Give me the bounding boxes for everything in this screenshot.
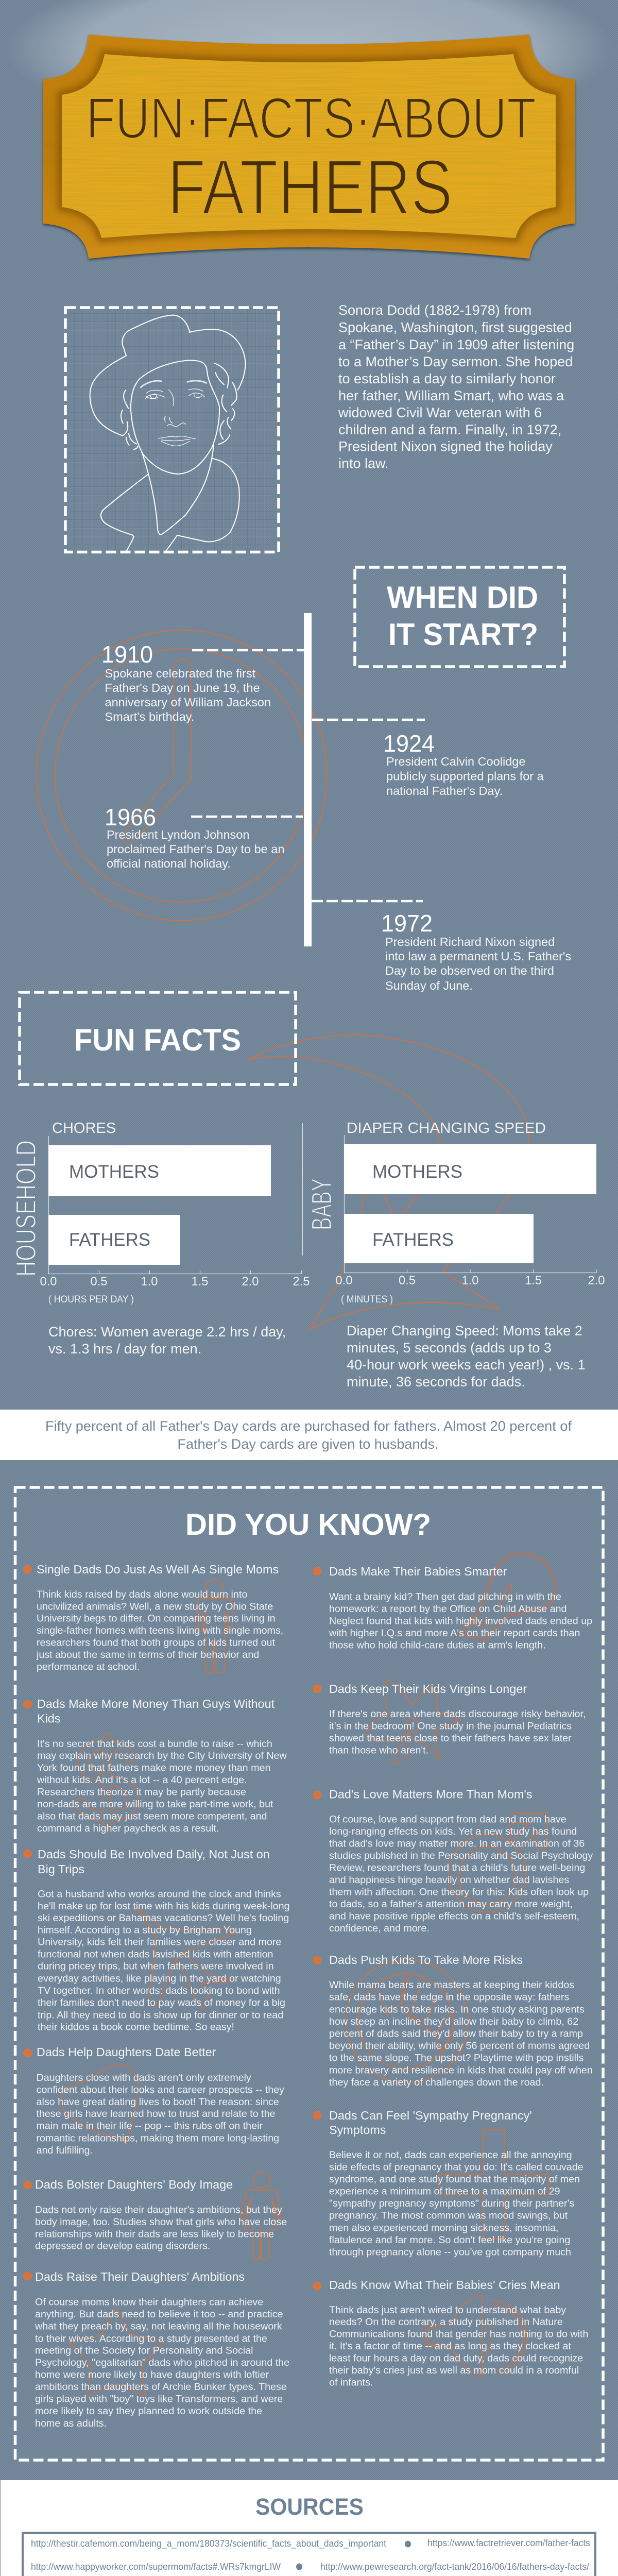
fact: date better: these girls have learned how to trust and relate to the xyxy=(36,2108,276,2120)
fact: body image: Dads not only raise their daughter's ambitions, but they xyxy=(35,2204,282,2215)
fact: involved daily: TV together. In other words: dads looking to bond with xyxy=(38,1985,280,1996)
bar chart: chores: 0.0 xyxy=(40,1275,57,1289)
bar chart: diaper changing speed: DIAPER CHANGING SPEED xyxy=(347,1120,546,1137)
fact: sympathy pregnancy: through pregnancy alone -- you've got company much xyxy=(329,2246,571,2258)
fact: more money: non-dads are more willing to take part-time work, but xyxy=(37,1799,273,1810)
fact: ambitions: home were more likely to have daughters with loftier xyxy=(35,2369,269,2380)
bar chart: chores: 1.0 xyxy=(141,1275,158,1289)
fact: involved daily: Big Trips xyxy=(38,1862,84,1876)
timeline entry 1910: anniversary of William Jackson xyxy=(105,696,271,709)
fact: virgins longer: Dads Keep Their Kids Virgins Longer xyxy=(329,1682,527,1696)
fact: babies' cries: Dads Know What Their Babies' Cries Mean xyxy=(329,2278,560,2292)
icon: airplane xyxy=(137,1908,235,2009)
fact: ambitions: girls played with "boy" toys like Transformers, and were xyxy=(35,2394,283,2405)
bar chart: chores: ( HOURS PER DAY ) xyxy=(48,1294,134,1305)
fact: dad's love: Dad's Love Matters More Than Mom's xyxy=(329,1788,533,1801)
timeline entry 1924: publicly supported plans for a xyxy=(386,770,544,783)
fact: virgins longer: than those who aren't. xyxy=(329,1744,428,1756)
fact: single dads: University begs to differ. On comparing teens living in xyxy=(37,1613,276,1624)
fact: more money: York found that fathers make more money than men xyxy=(37,1762,270,1773)
fact: single dads: just about the same in terms of their behavior and xyxy=(36,1649,259,1660)
fact: date better: romantic relationships, making them more long-lasting xyxy=(36,2133,279,2144)
fact: involved daily: their families don't need to pay wads of money for a big xyxy=(38,1997,285,2008)
heading: did you know: DID YOU KNOW? xyxy=(185,1508,431,1541)
fact: date better: and fulfilling. xyxy=(36,2145,93,2156)
icon: mustache outline xyxy=(248,1035,529,1329)
fact: more risks: safe, dads have the edge in the opposite way: fathers xyxy=(329,1992,569,2003)
fact: involved daily: functional not when dads lavished kids with attention xyxy=(38,1948,273,1960)
timeline entry 1972 xyxy=(381,910,575,992)
timeline entry 1924: 1924 xyxy=(383,730,435,757)
bullet xyxy=(313,2111,321,2120)
fact: more risks: While mama bears are masters at keeping their kiddos xyxy=(329,1979,574,1991)
timeline entry 1924 xyxy=(383,730,547,798)
timeline entry 1910: 1910 xyxy=(101,641,153,668)
fact: ambitions: meeting of the Society for Personality and Social xyxy=(35,2345,253,2357)
heading: sources: SOURCES xyxy=(255,2494,364,2520)
fact: more money: may explain why research by the City University of New xyxy=(37,1750,287,1761)
fact: virgins longer: If there's one area where dads discourage risky behavior, xyxy=(329,1708,586,1720)
icon: line-art portrait xyxy=(90,315,246,552)
callout band: cards statistic: Fifty percent of all Father's Day cards are purchased for fathers. Almost 20 percent of xyxy=(45,1418,572,1434)
fact: ambitions: what they preach by, say, not leaving all the housework xyxy=(35,2320,282,2332)
fact: more risks: they face a variety of challenges down the road. xyxy=(329,2077,544,2088)
fact: dad's love xyxy=(313,1788,596,1934)
icon: woman figure xyxy=(239,2172,282,2259)
panel: source links xyxy=(23,2533,595,2576)
fact: sympathy pregnancy: experience a minimum of three to a maximum of 29 xyxy=(329,2185,560,2197)
heading: when did it start: WHEN DID xyxy=(387,580,538,615)
fact: babies' cries xyxy=(313,2278,591,2388)
timeline entry 1910: Spokane celebrated the first xyxy=(105,667,256,680)
fact: babies' cries: it. It's a factor of time -- and as long as they clocked at xyxy=(329,2341,571,2352)
bar chart: chores: 2.5 xyxy=(293,1275,310,1289)
bar chart: diaper changing speed: ( MINUTES ) xyxy=(341,1294,393,1305)
bar chart: chores xyxy=(10,1120,310,1305)
fact: ambitions: more likely to say they planned to work outside the xyxy=(35,2405,262,2417)
bar chart: diaper changing speed: 1.5 xyxy=(525,1274,542,1287)
fact: virgins longer xyxy=(313,1682,589,1756)
text block: chores caption: vs. 1.3 hrs / day for men. xyxy=(48,1341,201,1357)
text block: chores caption: Chores: Women average 2.2 hrs / day, xyxy=(48,1324,286,1340)
bar chart: chores: 1.5 xyxy=(192,1275,208,1289)
fact: sympathy pregnancy: "sympathy pregnancy symptoms" during their partner's xyxy=(329,2198,574,2209)
bullet xyxy=(313,1567,321,1575)
fact: sympathy pregnancy: Dads Can Feel 'Sympathy Pregnancy' xyxy=(329,2109,532,2122)
fact: babies' cries: least four hours a day on dad duty, dads could recognize xyxy=(329,2352,583,2364)
timeline entry 1972: President Richard Nixon signed xyxy=(385,935,555,948)
fact: sympathy pregnancy: flatulence and far more. So don't feel like you're going xyxy=(329,2234,570,2246)
fact: more risks: Dads Push Kids To Take More Risks xyxy=(329,1953,523,1967)
fact: smarter babies: Neglect found that kids with highly involved dads ended up xyxy=(329,1616,592,1627)
fact: involved daily: ski expeditions or Bahamas vacations? Well he's fooling xyxy=(38,1912,289,1924)
bar chart: diaper changing speed xyxy=(305,1120,605,1305)
bullet xyxy=(313,2281,321,2291)
fact: sympathy pregnancy: Believe it or not, dads can experience all the annoying xyxy=(329,2149,572,2161)
heading: fun facts xyxy=(20,992,296,1084)
fact: single dads: Single Dads Do Just As Well As Single Moms xyxy=(37,1563,279,1576)
panel: source links: https://www.factretriever.com/father-facts xyxy=(427,2538,590,2548)
bar: mothers chores xyxy=(48,1145,271,1196)
text block: Sonora Dodd intro: President Nixon signed the holiday xyxy=(338,439,553,454)
icon: clock outline xyxy=(37,630,327,921)
icon: plus sign xyxy=(438,2130,548,2239)
timeline entry 1972: Day to be observed on the third xyxy=(385,964,554,977)
icon: star xyxy=(69,2308,164,2396)
timeline entry 1966 xyxy=(105,804,288,870)
fact: dad's love: studies published in the Personality and Social Psychology xyxy=(329,1850,593,1861)
fact: ambitions: home as adults. xyxy=(35,2418,107,2429)
fact: ambitions: Dads Raise Their Daughters' Ambitions xyxy=(35,2270,245,2283)
fact: dad's love: and have positive ripple effects on a child's self-esteem, xyxy=(329,1910,579,1922)
fact: virgins longer: it's in the bedroom! One study in the journal Pediatrics xyxy=(329,1721,572,1732)
bar chart: chores: 0.5 xyxy=(91,1275,107,1289)
fact: more money: Researchers theorize it may be partly because xyxy=(37,1787,246,1798)
fact: sympathy pregnancy xyxy=(313,2109,586,2258)
text block: Sonora Dodd intro: to establish a day to similarly honor xyxy=(338,371,556,386)
icon: male symbol xyxy=(449,1813,547,1912)
fact: more risks: to the same slope. The upshot? Playtime with pop instills xyxy=(329,2053,583,2064)
fact: body image xyxy=(23,2178,290,2251)
callout band: cards statistic: Father's Day cards are given to husbands. xyxy=(177,1436,439,1452)
bar: fathers chores xyxy=(48,1215,180,1265)
fact: smarter babies xyxy=(313,1565,595,1651)
fact: smarter babies: Want a brainy kid? Then get dad pitching in with the xyxy=(329,1591,561,1602)
timeline entry 1910: Smart's birthday. xyxy=(105,710,194,723)
title text: FATHERS xyxy=(167,143,453,230)
fact: more risks: percent of dads said they'd allow their baby to try a ramp xyxy=(329,2028,583,2039)
icon: heart xyxy=(62,2065,138,2142)
panel: did you know xyxy=(15,1487,603,2460)
timeline entry 1972: into law a permanent U.S. Father's xyxy=(385,950,571,963)
text block: Sonora Dodd intro: her father, William Smart, who was a xyxy=(338,388,564,403)
fact: involved daily: he'll make up for lost time with his kids during week-long xyxy=(38,1901,290,1912)
panel: source links: http://www.happyworker.com/supermom/facts#.WRs7kmgrLIW xyxy=(31,2562,281,2572)
bullet xyxy=(313,1791,321,1799)
bullet xyxy=(313,1956,321,1965)
fact: date better: Daughters close with dads aren't only extremely xyxy=(36,2072,251,2083)
fact: more risks: beyond their ability, while only 56 percent of moms agreed xyxy=(329,2040,590,2052)
timeline entry 1924: national Father's Day. xyxy=(386,784,503,798)
fact: more money: Dads Make More Money Than Guys Without xyxy=(37,1697,275,1710)
fact: involved daily: Dads Should Be Involved Daily, Not Just on xyxy=(38,1848,270,1861)
bullet xyxy=(23,2180,32,2190)
fact: smarter babies: with higher I.Q.s and more A's on their report cards than xyxy=(329,1628,580,1639)
fact: dad's love: confidence, and more. xyxy=(329,1923,430,1934)
fact: babies' cries: Think dads just aren't wired to understand what baby xyxy=(329,2304,566,2316)
panel: source links: http://thestir.cafemom.com/being_a_mom/180373/scientific_facts_about_dads_important xyxy=(31,2538,386,2549)
fact: ambitions: Psychology, "egalitarian" dads who pitched in around the xyxy=(35,2357,289,2368)
bullet xyxy=(313,1685,321,1693)
fact: ambitions: anything. But dads need to believe it too -- and practice xyxy=(35,2309,283,2320)
panel: source links: http://www.pewresearch.org/fact-tank/2016/06/16/fathers-day-facts/ xyxy=(320,2562,589,2572)
icon: light bulb xyxy=(461,1554,555,1640)
fact: more risks: how steep an incline they'd allow their baby to climb, 62 xyxy=(329,2016,578,2027)
timeline entry 1910 xyxy=(101,641,274,723)
fact: body image: Dads Bolster Daughters' Body Image xyxy=(35,2178,233,2191)
fact: ambitions: to their wives. According to a study presented at the xyxy=(35,2333,267,2344)
bar chart: diaper changing speed: 2.0 xyxy=(588,1274,605,1287)
fact: ambitions xyxy=(23,2270,293,2429)
fact: babies' cries: needs? On the contrary, a study published in Nature xyxy=(329,2316,563,2328)
bullet xyxy=(23,1565,32,1573)
fact: more money: without kids. And it's a lot -- a 40 percent edge. xyxy=(37,1774,247,1786)
bullet xyxy=(23,1700,32,1708)
icon: man figure xyxy=(198,1580,232,1672)
bar chart: diaper changing speed: 0.0 xyxy=(336,1274,352,1287)
fact: more money: command a higher paycheck as a result. xyxy=(37,1823,219,1834)
callout band: cards statistic xyxy=(0,1410,618,1460)
fact: more risks xyxy=(313,1953,595,2088)
timeline entry 1972: 1972 xyxy=(381,910,433,937)
fact: dad's love: Of course, love and support from dad and mom have xyxy=(329,1814,566,1825)
heading: when did it start xyxy=(355,567,564,667)
bar: fathers diaper: FATHERS xyxy=(372,1230,454,1250)
timeline xyxy=(101,613,575,992)
fact: single dads: performance at school. xyxy=(37,1661,140,1672)
fact: date better xyxy=(23,2045,287,2156)
bar chart: diaper changing speed: 0.5 xyxy=(399,1274,416,1287)
text block: Sonora Dodd intro: Sonora Dodd (1882-1978) from xyxy=(338,302,531,318)
fact: involved daily: their kiddos a book come bedtime. So easy! xyxy=(38,2022,234,2033)
fact: dad's love: that dad's love may matter more. In an examination of 36 xyxy=(329,1838,585,1850)
title text: FUN·FACTS·ABOUT xyxy=(86,86,536,150)
fact: ambitions: ambitions than daughters of Archie Bunker types. These xyxy=(35,2381,287,2393)
icon: badge circle xyxy=(346,1960,468,2082)
text block: diaper caption: 40-hour work weeks each year!) , vs. 1 xyxy=(347,1357,586,1372)
heading: when did it start: IT START? xyxy=(388,617,538,652)
bullet xyxy=(23,2048,32,2058)
fact: involved daily: University, kids felt their families were closer and more xyxy=(38,1936,281,1947)
fact: dad's love: to dads, so a father's attention may carry more weight, xyxy=(329,1899,573,1910)
timeline entry 1966: official national holiday. xyxy=(107,857,231,870)
fact: date better: also have great dating lives to boot! The reason: since xyxy=(36,2096,279,2108)
chart label: baby: BABY xyxy=(305,1178,337,1230)
bar chart: chores: 2.0 xyxy=(242,1275,259,1289)
bar: mothers diaper xyxy=(344,1144,596,1194)
fact: involved daily: himself. According to a study by Brigham Young xyxy=(38,1925,252,1936)
fact: body image: relationships with their dads are less likely to become xyxy=(35,2229,274,2240)
fact: dad's love: long-ranging effects on kids. Yet a new study has found xyxy=(329,1826,577,1837)
title sign: wooden plaque xyxy=(43,35,575,259)
text block: Sonora Dodd intro: to a Mother’s Day sermon. She hoped xyxy=(338,354,573,369)
bullet xyxy=(23,1850,32,1858)
panel: portrait of Sonora Dodd xyxy=(65,308,279,552)
fact: date better: main male in their life -- pop -- this rubs off on their xyxy=(36,2121,263,2132)
icon: flower xyxy=(366,1680,461,1764)
fact: more money: It's no secret that kids cost a bundle to raise -- which xyxy=(37,1738,272,1750)
fact: dad's love: them with affection. One theory for this: Kids often look up xyxy=(329,1887,589,1898)
chart label: household: HOUSEHOLD xyxy=(10,1140,42,1277)
fact: virgins longer: showed that teens close to their fathers have sex later xyxy=(329,1733,572,1744)
bar: fathers diaper xyxy=(344,1214,534,1263)
fact: babies' cries: their baby's cries just as well as mom could in a roomful xyxy=(329,2365,579,2376)
icon: dollar sign: $ xyxy=(74,1715,140,1848)
fact: sympathy pregnancy: pregnancy. The most common was mood swings, but xyxy=(329,2210,568,2222)
fact: babies' cries: Communications found that gender has nothing to do with xyxy=(329,2329,588,2340)
fact: involved daily: Got a husband who works around the clock and thinks xyxy=(38,1889,281,1900)
fact: dad's love: Review, researchers found that a child's future well-being xyxy=(329,1862,585,1873)
bar chart: chores: CHORES xyxy=(52,1120,116,1137)
divider between charts xyxy=(302,1123,303,1256)
text block: diaper caption: minutes, 5 seconds (adds up to 3 xyxy=(347,1340,552,1355)
fact: date better: Dads Help Daughters Date Better xyxy=(37,2045,216,2059)
heading: fun facts: FUN FACTS xyxy=(74,1023,241,1057)
icon: pacifier xyxy=(425,2295,527,2376)
bar: fathers chores: FATHERS xyxy=(69,1230,150,1250)
fact: sympathy pregnancy: Symptoms xyxy=(329,2123,386,2137)
fact: sympathy pregnancy: men also experienced morning sickness, insomnia, xyxy=(329,2223,558,2234)
timeline entry 1966: proclaimed Father's Day to be an xyxy=(107,842,284,856)
fact: smarter babies: Dads Make Their Babies Smarter xyxy=(329,1565,507,1578)
fact: more money xyxy=(23,1697,289,1834)
fact: more risks: more bravery and resilience in kids that could pay off when xyxy=(329,2065,593,2076)
fact: single dads: researchers found that both groups of kids turned out xyxy=(37,1637,275,1649)
fact: single dads: uncivilized animals? Well, a new study by Ohio State xyxy=(37,1601,273,1613)
fact: sympathy pregnancy: syndrome, and one study found that the majority of men xyxy=(329,2174,580,2185)
timeline entry 1966: President Lyndon Johnson xyxy=(107,828,249,841)
text block: Sonora Dodd intro: children and a farm. Finally, in 1972, xyxy=(338,422,561,437)
fact: single dads xyxy=(23,1563,286,1672)
timeline entry 1924: President Calvin Coolidge xyxy=(386,755,525,768)
fact: single dads: Think kids raised by dads alone would turn into xyxy=(37,1589,247,1600)
fact: babies' cries: of infants. xyxy=(329,2377,373,2388)
fact: smarter babies: homework: a report by the Office on Child Abuse and xyxy=(329,1603,566,1615)
fact: involved daily: trip. All they need to do is show up for dinner or to read xyxy=(38,2009,283,2021)
fact: date better: confident about their looks and career prospects -- they xyxy=(36,2084,284,2096)
fact: more money: also that dads may just seem more competent, and xyxy=(37,1810,267,1822)
fact: more risks: encourage kids to take risks. In one study asking parents xyxy=(329,2004,585,2015)
fact: involved daily xyxy=(23,1848,293,2033)
text block: Sonora Dodd intro: widowed Civil War veteran with 6 xyxy=(338,405,542,420)
bar chart: diaper changing speed: 1.0 xyxy=(462,1274,478,1287)
timeline entry 1972: Sunday of June. xyxy=(385,979,473,992)
title text xyxy=(86,86,536,230)
fact: sympathy pregnancy: side effects of pregnancy that you do: It's called couvade xyxy=(329,2162,583,2173)
text block: diaper caption: Diaper Changing Speed: Moms take 2 xyxy=(347,1323,582,1338)
fact: ambitions: Of course moms know their daughters can achieve xyxy=(35,2297,263,2308)
fact: body image: depressed or develop eating disorders. xyxy=(35,2240,210,2251)
fact: single dads: single-father homes with teens living with single moms, xyxy=(37,1625,283,1636)
timeline entry 1966: 1966 xyxy=(105,804,156,831)
text block: Sonora Dodd intro: into law. xyxy=(338,455,389,471)
bar: mothers diaper: MOTHERS xyxy=(372,1162,462,1182)
fact: dad's love: and happiness hinge heavily on whether dad lavishes xyxy=(329,1874,569,1886)
text block: Sonora Dodd intro: Spokane, Washington, first suggested xyxy=(338,319,572,335)
fact: involved daily: everyday activities, like playing in the yard or watching xyxy=(38,1973,281,1985)
bullet xyxy=(23,2272,32,2280)
text block: diaper caption: minute, 36 seconds for dads. xyxy=(347,1374,525,1389)
fact: body image: body image, too. Studies show that girls who have close xyxy=(35,2216,287,2228)
fact: involved daily: during pricey trips, but when fathers were involved in xyxy=(38,1961,274,1972)
text block: Sonora Dodd intro: a “Father’s Day” in 1909 after listening xyxy=(338,337,574,352)
bar: mothers chores: MOTHERS xyxy=(69,1162,159,1182)
fact: more money: Kids xyxy=(37,1711,61,1725)
timeline entry 1910: Father's Day on June 19, the xyxy=(105,681,260,694)
fact: smarter babies: those who hold child-care duties at arm's length. xyxy=(329,1639,546,1651)
